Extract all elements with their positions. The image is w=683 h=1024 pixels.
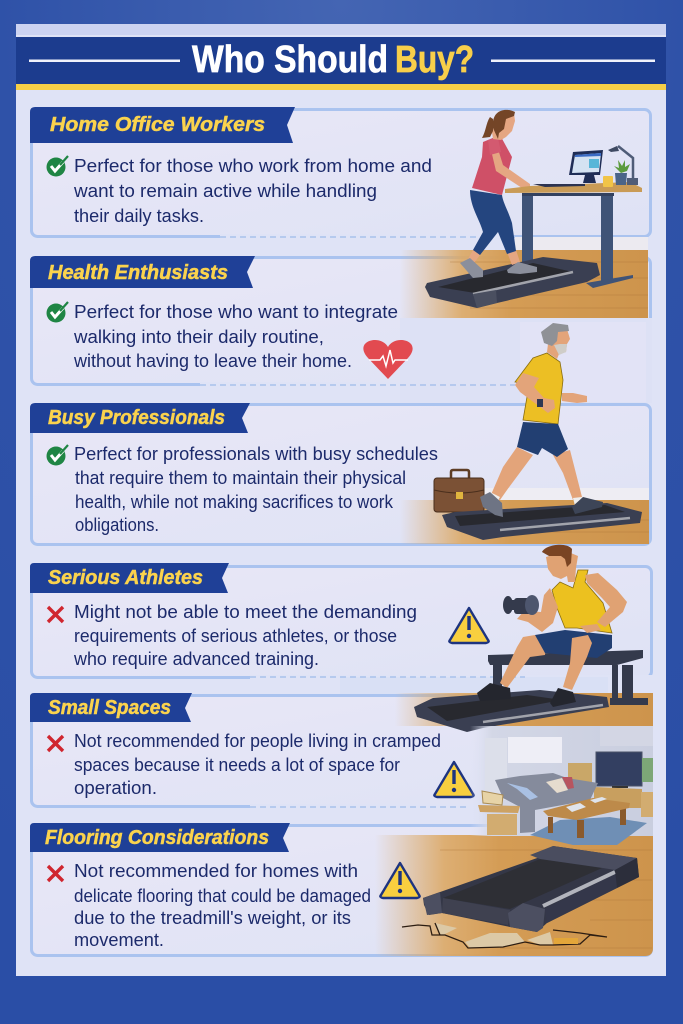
shorts xyxy=(535,630,612,658)
arms xyxy=(517,573,627,633)
title banner xyxy=(16,37,666,90)
rug xyxy=(530,817,647,845)
monitor xyxy=(533,150,603,187)
illustration: treadmill on cracked floor xyxy=(380,846,639,948)
head xyxy=(541,323,570,359)
lamp xyxy=(618,146,633,180)
panel: health enthusiasts xyxy=(30,256,652,403)
text: movement. xyxy=(74,930,164,950)
head xyxy=(542,545,578,582)
text: their daily tasks. xyxy=(74,206,204,226)
heading: Flooring Considerations xyxy=(45,827,269,849)
text: requirements of serious athletes, or those xyxy=(74,626,397,646)
text: without having to leave their home. xyxy=(73,351,352,371)
text: due to the treadmill's weight, or its xyxy=(74,908,351,928)
tv stand xyxy=(594,787,642,808)
text: Might not be able to meet the demanding xyxy=(74,602,417,622)
heading: Busy Professionals xyxy=(48,407,225,429)
desk top xyxy=(505,182,642,193)
text xyxy=(74,861,371,950)
skin ankles xyxy=(468,250,520,265)
icon: cross xyxy=(48,736,63,751)
text: Perfect for those who want to integrate xyxy=(74,302,398,322)
head xyxy=(482,110,515,140)
text: spaces because it needs a lot of space for xyxy=(74,755,400,775)
shoes xyxy=(477,683,511,701)
panel: busy professionals xyxy=(30,403,650,544)
legs xyxy=(500,635,546,688)
text: walking into their daily routine, xyxy=(73,327,324,347)
arm xyxy=(491,149,530,189)
text xyxy=(74,444,438,535)
icon: cross xyxy=(48,607,63,622)
text xyxy=(73,602,417,669)
window xyxy=(508,737,562,763)
illustration: athlete on bench xyxy=(414,545,648,732)
text: Not recommended for homes with xyxy=(74,861,358,881)
floors xyxy=(375,237,653,956)
tank top xyxy=(552,570,612,633)
back arm xyxy=(562,393,587,403)
heading: Serious Athletes xyxy=(48,567,203,589)
plant xyxy=(603,160,630,187)
heading: Small Spaces xyxy=(48,697,171,719)
text: delicate flooring that could be damaged xyxy=(74,886,371,906)
bench xyxy=(488,650,648,705)
icon: check xyxy=(46,445,68,466)
text xyxy=(74,731,441,798)
icon: warning xyxy=(434,762,474,797)
text: health, while not making sacrifices to work xyxy=(75,492,394,512)
text xyxy=(73,156,432,226)
title: Who Should xyxy=(192,39,388,81)
panel: serious athletes xyxy=(30,563,654,694)
text xyxy=(73,302,398,371)
cabinet xyxy=(568,763,592,782)
text: operation. xyxy=(74,778,157,798)
text: Not recommended for people living in cramped xyxy=(74,731,441,751)
text: want to remain active while handling xyxy=(73,181,377,201)
cracked floor xyxy=(402,923,607,948)
shoes xyxy=(480,492,503,517)
treadmill xyxy=(442,503,642,540)
treadmill xyxy=(414,690,609,732)
illustration: woman at standing desk xyxy=(425,110,642,308)
icon: cross xyxy=(48,866,63,881)
desk legs xyxy=(522,194,633,288)
shorts xyxy=(517,422,568,457)
socks xyxy=(488,492,584,506)
icon: check xyxy=(46,302,68,322)
briefcase xyxy=(434,470,484,512)
text: obligations. xyxy=(75,515,159,535)
heading: Home Office Workers xyxy=(50,114,265,136)
boxes xyxy=(478,791,520,835)
heading: Health Enthusiasts xyxy=(48,262,228,284)
illustration: man walking on treadmill xyxy=(434,323,642,540)
torso xyxy=(472,135,512,195)
panel: home office workers xyxy=(30,107,650,239)
icon: warning xyxy=(380,863,420,898)
icon: heart xyxy=(363,340,413,379)
front leg xyxy=(563,635,592,690)
icon: warning xyxy=(449,608,489,643)
treadmill xyxy=(425,257,600,308)
shirt xyxy=(515,353,563,424)
title banner: Buy? xyxy=(395,39,474,81)
dumbbell xyxy=(503,595,539,615)
text: that require them to maintain their physical xyxy=(75,468,406,488)
panel: flooring considerations xyxy=(30,823,652,956)
tv xyxy=(596,752,642,788)
coffee table xyxy=(543,797,630,838)
shoes xyxy=(460,258,483,278)
jeans xyxy=(470,190,516,255)
legs xyxy=(490,447,582,500)
icon: check xyxy=(46,156,68,176)
front arm xyxy=(515,373,555,413)
panel: small spaces xyxy=(30,693,654,809)
text: Perfect for those who work from home and xyxy=(74,156,432,176)
illustration: living room xyxy=(470,726,653,845)
text: who require advanced training. xyxy=(73,649,319,669)
text: Perfect for professionals with busy schedules xyxy=(74,444,438,464)
sofa xyxy=(495,773,598,833)
treadmill xyxy=(423,846,639,932)
